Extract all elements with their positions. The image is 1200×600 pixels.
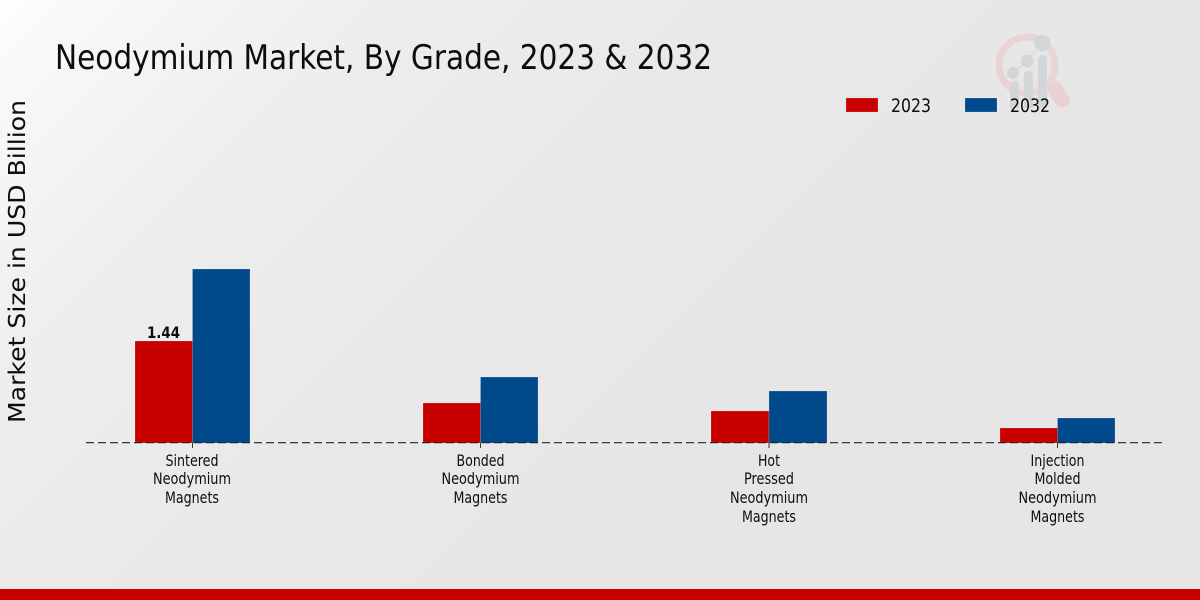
category label: Sintered Neodymium Magnets: Magnets xyxy=(165,488,219,507)
category label: Injection Molded Neodymium Magnets xyxy=(1018,451,1096,526)
category label: Sintered Neodymium Magnets: Neodymium xyxy=(153,469,231,488)
bars: Bonded Neodymium Magnets xyxy=(423,377,538,443)
category label: Sintered Neodymium Magnets: Sintered xyxy=(166,451,218,470)
bar chart xyxy=(86,269,1164,448)
category label: Bonded Neodymium Magnets: Neodymium xyxy=(442,469,520,488)
legend item: 2032: 2032 xyxy=(1010,95,1050,117)
legend item: 2023: 2023 xyxy=(891,95,931,117)
category label: Hot Pressed Neodymium Magnets: Magnets xyxy=(742,507,796,526)
tick marks xyxy=(192,443,1058,448)
icon: watermark logo xyxy=(999,35,1062,108)
bars: Sintered Neodymium Magnets xyxy=(135,269,250,443)
category label: Injection Molded Neodymium Magnets: Injection xyxy=(1030,451,1084,470)
category label: Bonded Neodymium Magnets xyxy=(442,451,520,507)
y axis label: Market Size in USD Billion xyxy=(5,100,31,423)
category label: Bonded Neodymium Magnets: Magnets xyxy=(454,488,508,507)
category label: Injection Molded Neodymium Magnets: Neodymium xyxy=(1018,488,1096,507)
title: Neodymium Market, By Grade, 2023 & 2032 xyxy=(55,38,712,78)
category label: Sintered Neodymium Magnets xyxy=(153,451,231,507)
category label: Hot Pressed Neodymium Magnets: Neodymium xyxy=(730,488,808,507)
data label: 1.44 xyxy=(147,323,180,342)
footer bar xyxy=(0,589,1200,600)
legend xyxy=(846,95,1050,117)
legend item: 2023 xyxy=(846,95,931,117)
legend item: 2032 xyxy=(965,95,1050,117)
category label: Injection Molded Neodymium Magnets: Molded xyxy=(1034,469,1080,488)
baseline xyxy=(86,442,1164,444)
bars: Hot Pressed Neodymium Magnets xyxy=(711,391,827,443)
bars: Injection Molded Neodymium Magnets xyxy=(1000,418,1115,443)
category label: Hot Pressed Neodymium Magnets: Pressed xyxy=(744,469,794,488)
category label: Bonded Neodymium Magnets: Bonded xyxy=(456,451,504,470)
category label: Hot Pressed Neodymium Magnets: Hot xyxy=(758,451,780,470)
category label: Injection Molded Neodymium Magnets: Magnets xyxy=(1030,507,1084,526)
category label: Hot Pressed Neodymium Magnets xyxy=(730,451,808,526)
